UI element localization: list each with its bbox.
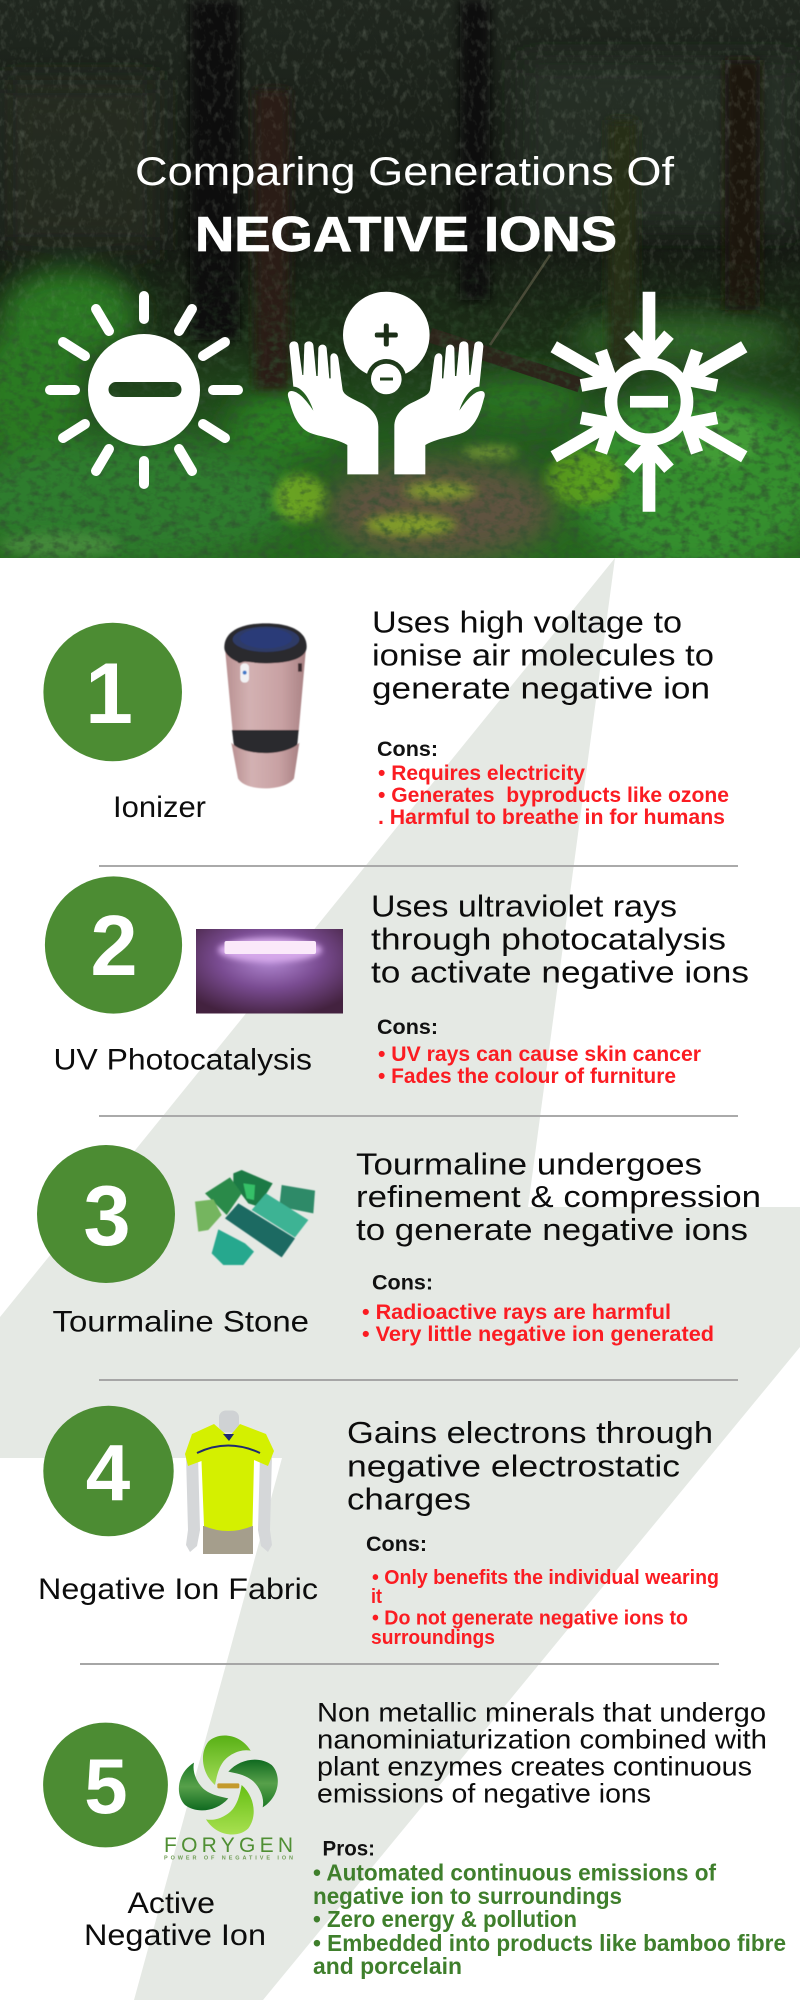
pros: and porcelain	[313, 1953, 462, 1979]
description 3: Tourmaline undergoes	[356, 1147, 702, 1182]
title	[135, 150, 675, 262]
number badge 1: 1	[85, 646, 133, 742]
description 4: Gains electrons through	[347, 1415, 713, 1450]
label: Negative Ion Fabric: Negative Ion Fabric	[38, 1573, 318, 1606]
cons 4	[366, 1533, 719, 1649]
panel: header forest photo	[0, 0, 800, 570]
pros: • Automated continuous emissions of	[313, 1860, 716, 1886]
number badge 2	[45, 876, 182, 1014]
cons 1: . Harmful to breathe in for humans	[378, 806, 725, 829]
description 1	[372, 604, 714, 706]
panel: item 4 negative ion fabric	[38, 1406, 719, 1649]
panel: item 5 active negative ion	[43, 1698, 786, 1979]
cons 4: Cons:	[366, 1533, 427, 1556]
description 1: Uses high voltage to	[372, 604, 682, 640]
description 3: refinement & compression	[356, 1179, 761, 1214]
description 5: emissions of negative ions	[317, 1779, 651, 1809]
description 4: negative electrostatic	[347, 1448, 680, 1484]
label: Active Negative Ion: Negative Ion	[84, 1919, 266, 1952]
cons 1	[377, 738, 729, 829]
cons 1: Cons:	[377, 738, 438, 761]
icon: sun with minus sign	[50, 296, 238, 484]
description 4	[347, 1415, 713, 1516]
description 2: Uses ultraviolet rays	[371, 888, 677, 924]
title: Comparing Generations Of	[135, 150, 675, 194]
title: NEGATIVE IONS	[195, 208, 617, 262]
number badge 1	[43, 623, 182, 761]
cons 3: • Radioactive rays are harmful	[362, 1301, 671, 1324]
background diagonal shape	[0, 558, 800, 2000]
pros: • Zero energy & pollution	[313, 1906, 577, 1932]
label: Active Negative Ion: Active	[128, 1887, 215, 1920]
description 3: to generate negative ions	[356, 1212, 748, 1247]
description 2: through photocatalysis	[371, 921, 726, 956]
label: Active Negative Ion	[84, 1887, 266, 1952]
cons 1: • Requires electricity	[378, 762, 585, 785]
number badge 4	[43, 1406, 174, 1536]
description 2: to activate negative ions	[371, 954, 749, 989]
pros: Pros:	[322, 1838, 375, 1861]
image: mannequin wearing shirt	[185, 1410, 274, 1554]
logo: Forygen: POWER OF NEGATIVE ION	[164, 1856, 293, 1862]
label: Ionizer: Ionizer	[113, 791, 206, 824]
panel: item 1 ionizer	[43, 604, 729, 829]
description 3	[356, 1147, 761, 1247]
cons 3: • Very little negative ion generated	[362, 1323, 714, 1346]
cons 4: surroundings	[371, 1627, 495, 1649]
cons 2: • UV rays can cause skin cancer	[378, 1043, 701, 1066]
cons 3: Cons:	[372, 1272, 433, 1294]
description 5: plant enzymes creates continuous	[317, 1752, 752, 1782]
panel: item 2 UV photocatalysis	[45, 876, 749, 1088]
cons 4: it	[371, 1586, 382, 1608]
number badge 3: 3	[83, 1169, 131, 1264]
logo: Forygen: FORYGEN	[164, 1834, 293, 1857]
cons 2	[377, 1016, 701, 1088]
pros: • Embedded into products like bamboo fibre	[313, 1930, 786, 1956]
cons 3	[362, 1272, 714, 1346]
cons 2: • Fades the colour of furniture	[378, 1065, 676, 1088]
description 5: Non metallic minerals that undergo	[317, 1698, 766, 1728]
cons 1: • Generates byproducts like ozone	[378, 784, 729, 807]
pros	[313, 1838, 786, 1979]
cons 4: • Do not generate negative ions to	[372, 1608, 688, 1630]
description 1: generate negative ion	[372, 670, 710, 706]
description 5	[317, 1698, 767, 1809]
panel: item 3 tourmaline stone	[37, 1145, 761, 1346]
icon: hands holding plus and minus ions	[288, 280, 485, 474]
logo: Forygen	[164, 1736, 293, 1862]
description 1: ionise air molecules to	[372, 637, 714, 672]
number badge 3	[37, 1145, 175, 1283]
description 5: nanominiaturization combined with	[317, 1725, 767, 1755]
number badge 4: 4	[86, 1428, 131, 1517]
icon: snowflake with minus sign	[544, 292, 754, 512]
label: Tourmaline Stone: Tourmaline Stone	[52, 1306, 309, 1339]
number badge 5	[43, 1723, 168, 1847]
description 2	[371, 888, 749, 989]
pros: negative ion to surroundings	[313, 1883, 622, 1909]
cons 2: Cons:	[377, 1016, 438, 1039]
label: UV Photocatalysis: UV Photocatalysis	[54, 1044, 312, 1077]
image: tourmaline crystals	[195, 1170, 315, 1265]
image: ionizer device	[224, 623, 307, 788]
description 4: charges	[347, 1482, 471, 1516]
image: UV lamp	[196, 929, 343, 1014]
number badge 5: 5	[84, 1742, 128, 1830]
cons 4: • Only benefits the individual wearing	[372, 1567, 719, 1589]
number badge 2: 2	[90, 899, 138, 994]
